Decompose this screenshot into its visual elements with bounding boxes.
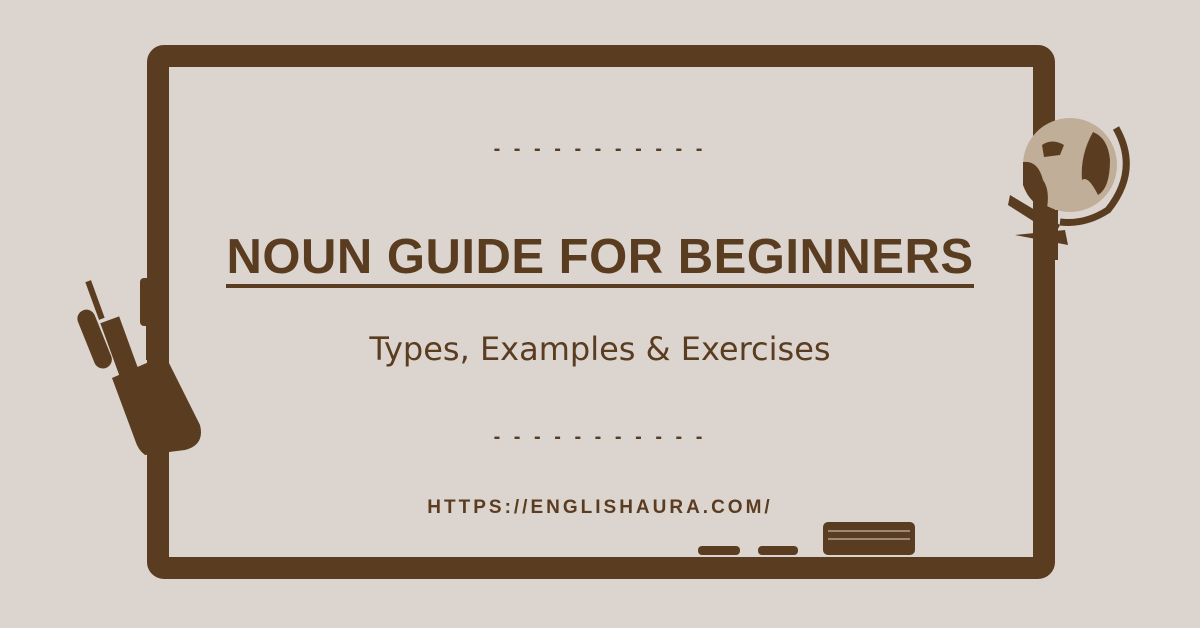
title: NOUN GUIDE FOR BEGINNERS xyxy=(226,230,974,284)
url: HTTPS://ENGLISHAURA.COM/ xyxy=(427,497,773,518)
chalk erasers xyxy=(698,522,915,555)
icon: globe xyxy=(1008,118,1130,260)
subtitle: Types, Examples & Exercises xyxy=(369,330,831,368)
bottom dashes: - - - - - - - - - - - xyxy=(494,426,706,448)
top dashes: - - - - - - - - - - - xyxy=(494,138,706,160)
icon: pencil cup xyxy=(77,278,201,455)
